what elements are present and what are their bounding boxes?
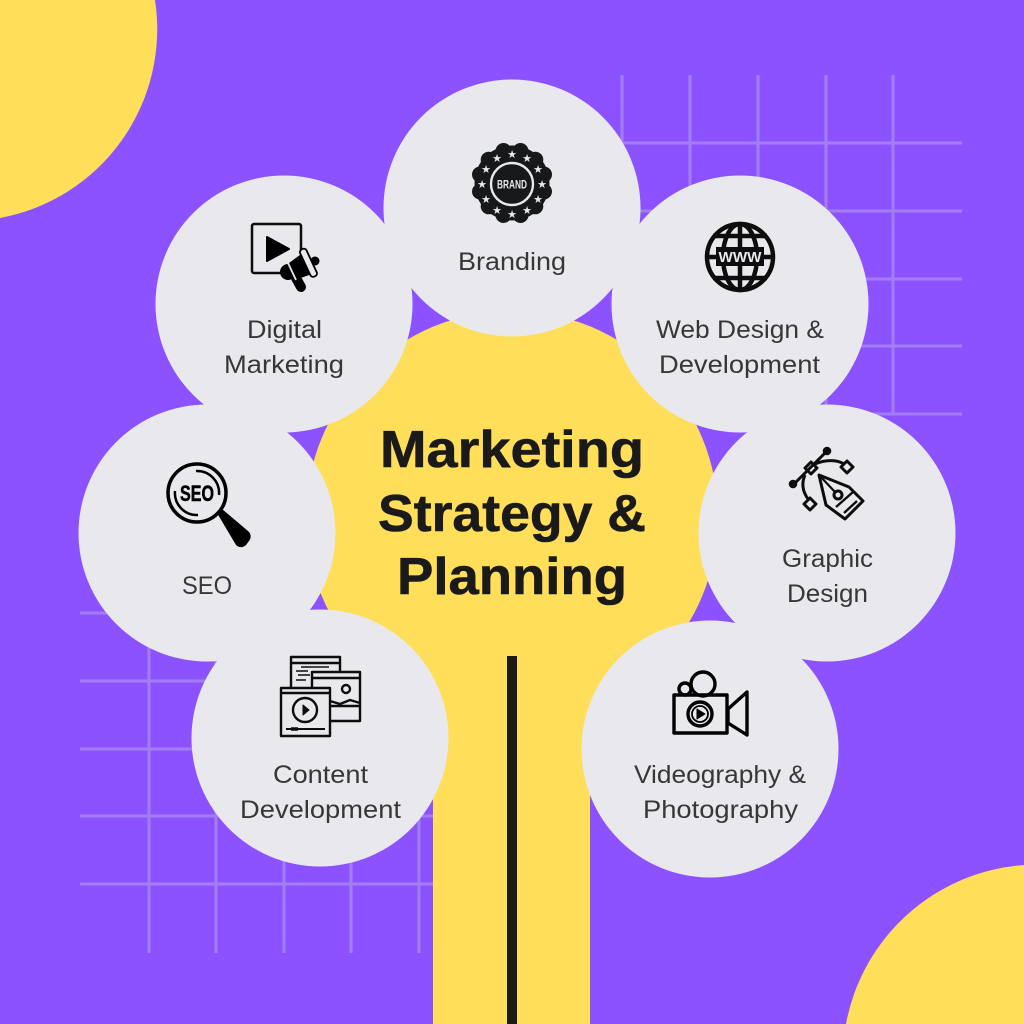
- panel: graphic design circle: [698, 404, 956, 662]
- icon: brand badge: ★: [522, 153, 532, 165]
- label: graphic design: [782, 545, 873, 608]
- label: web design: Development: [659, 351, 820, 379]
- icon: seo magnifier: SEO: [180, 481, 214, 506]
- icon: video camera: [674, 672, 747, 735]
- tree trunk: [433, 600, 590, 1024]
- icon: brand badge: BRAND: [497, 178, 527, 192]
- panel: videography circle: [582, 620, 838, 878]
- title: Strategy &: [378, 485, 646, 543]
- label: graphic design: Graphic: [782, 545, 873, 573]
- title: Planning: [397, 548, 627, 606]
- label: videography and photography: [634, 761, 806, 824]
- grid: bottom left: [80, 613, 488, 953]
- label: digital marketing: [224, 316, 344, 379]
- label: digital marketing: Digital: [247, 316, 322, 344]
- icon: pen tool: [790, 448, 863, 519]
- icon: brand badge: ★: [533, 164, 543, 176]
- corner circle: top left: [0, 0, 157, 218]
- icon: www globe: [707, 223, 773, 291]
- central yellow circle: [306, 311, 718, 723]
- trunk divider line: [507, 656, 517, 1024]
- icon: brand badge: ★: [522, 205, 532, 217]
- title: Marketing: [380, 421, 644, 479]
- label: graphic design: Design: [787, 580, 868, 608]
- icon: video with megaphone: [252, 224, 320, 287]
- label: videography and photography: Photography: [643, 796, 799, 824]
- icon: brand badge: ★: [481, 194, 491, 206]
- label: content development: Development: [240, 796, 401, 824]
- panel: digital marketing circle: [156, 176, 412, 432]
- grid: top right: [553, 75, 962, 415]
- icon: brand badge: ★: [477, 179, 487, 191]
- label: content development: [240, 761, 401, 824]
- panel: branding circle: [384, 80, 640, 336]
- title: [378, 421, 646, 606]
- icon: content windows: [281, 657, 360, 736]
- label: web design: [656, 316, 824, 379]
- label: branding: Branding: [458, 248, 566, 276]
- panel: seo circle: [78, 404, 336, 662]
- icon: brand badge: ★: [533, 194, 543, 206]
- corner circle: bottom right: [846, 865, 1024, 1024]
- label: digital marketing: Marketing: [224, 351, 344, 379]
- label: videography and photography: Videography &: [634, 761, 806, 789]
- icon: brand badge: ★: [481, 164, 491, 176]
- icon: brand badge: ★: [537, 179, 547, 191]
- label: web design: Web Design &: [656, 316, 824, 344]
- panel: web design circle: [612, 176, 868, 432]
- panel: content development circle: [192, 610, 448, 866]
- icon: brand badge: ★: [492, 205, 502, 217]
- icon: brand badge: ★: [507, 149, 517, 161]
- icon: seo magnifier: [168, 464, 251, 547]
- label: seo: SEO: [182, 572, 232, 600]
- label: content development: Content: [273, 761, 368, 789]
- icon: brand badge: ★: [492, 153, 502, 165]
- icon: www globe: WWW: [718, 249, 762, 266]
- icon: brand badge: ★: [507, 209, 517, 221]
- icon: brand badge: [472, 143, 552, 223]
